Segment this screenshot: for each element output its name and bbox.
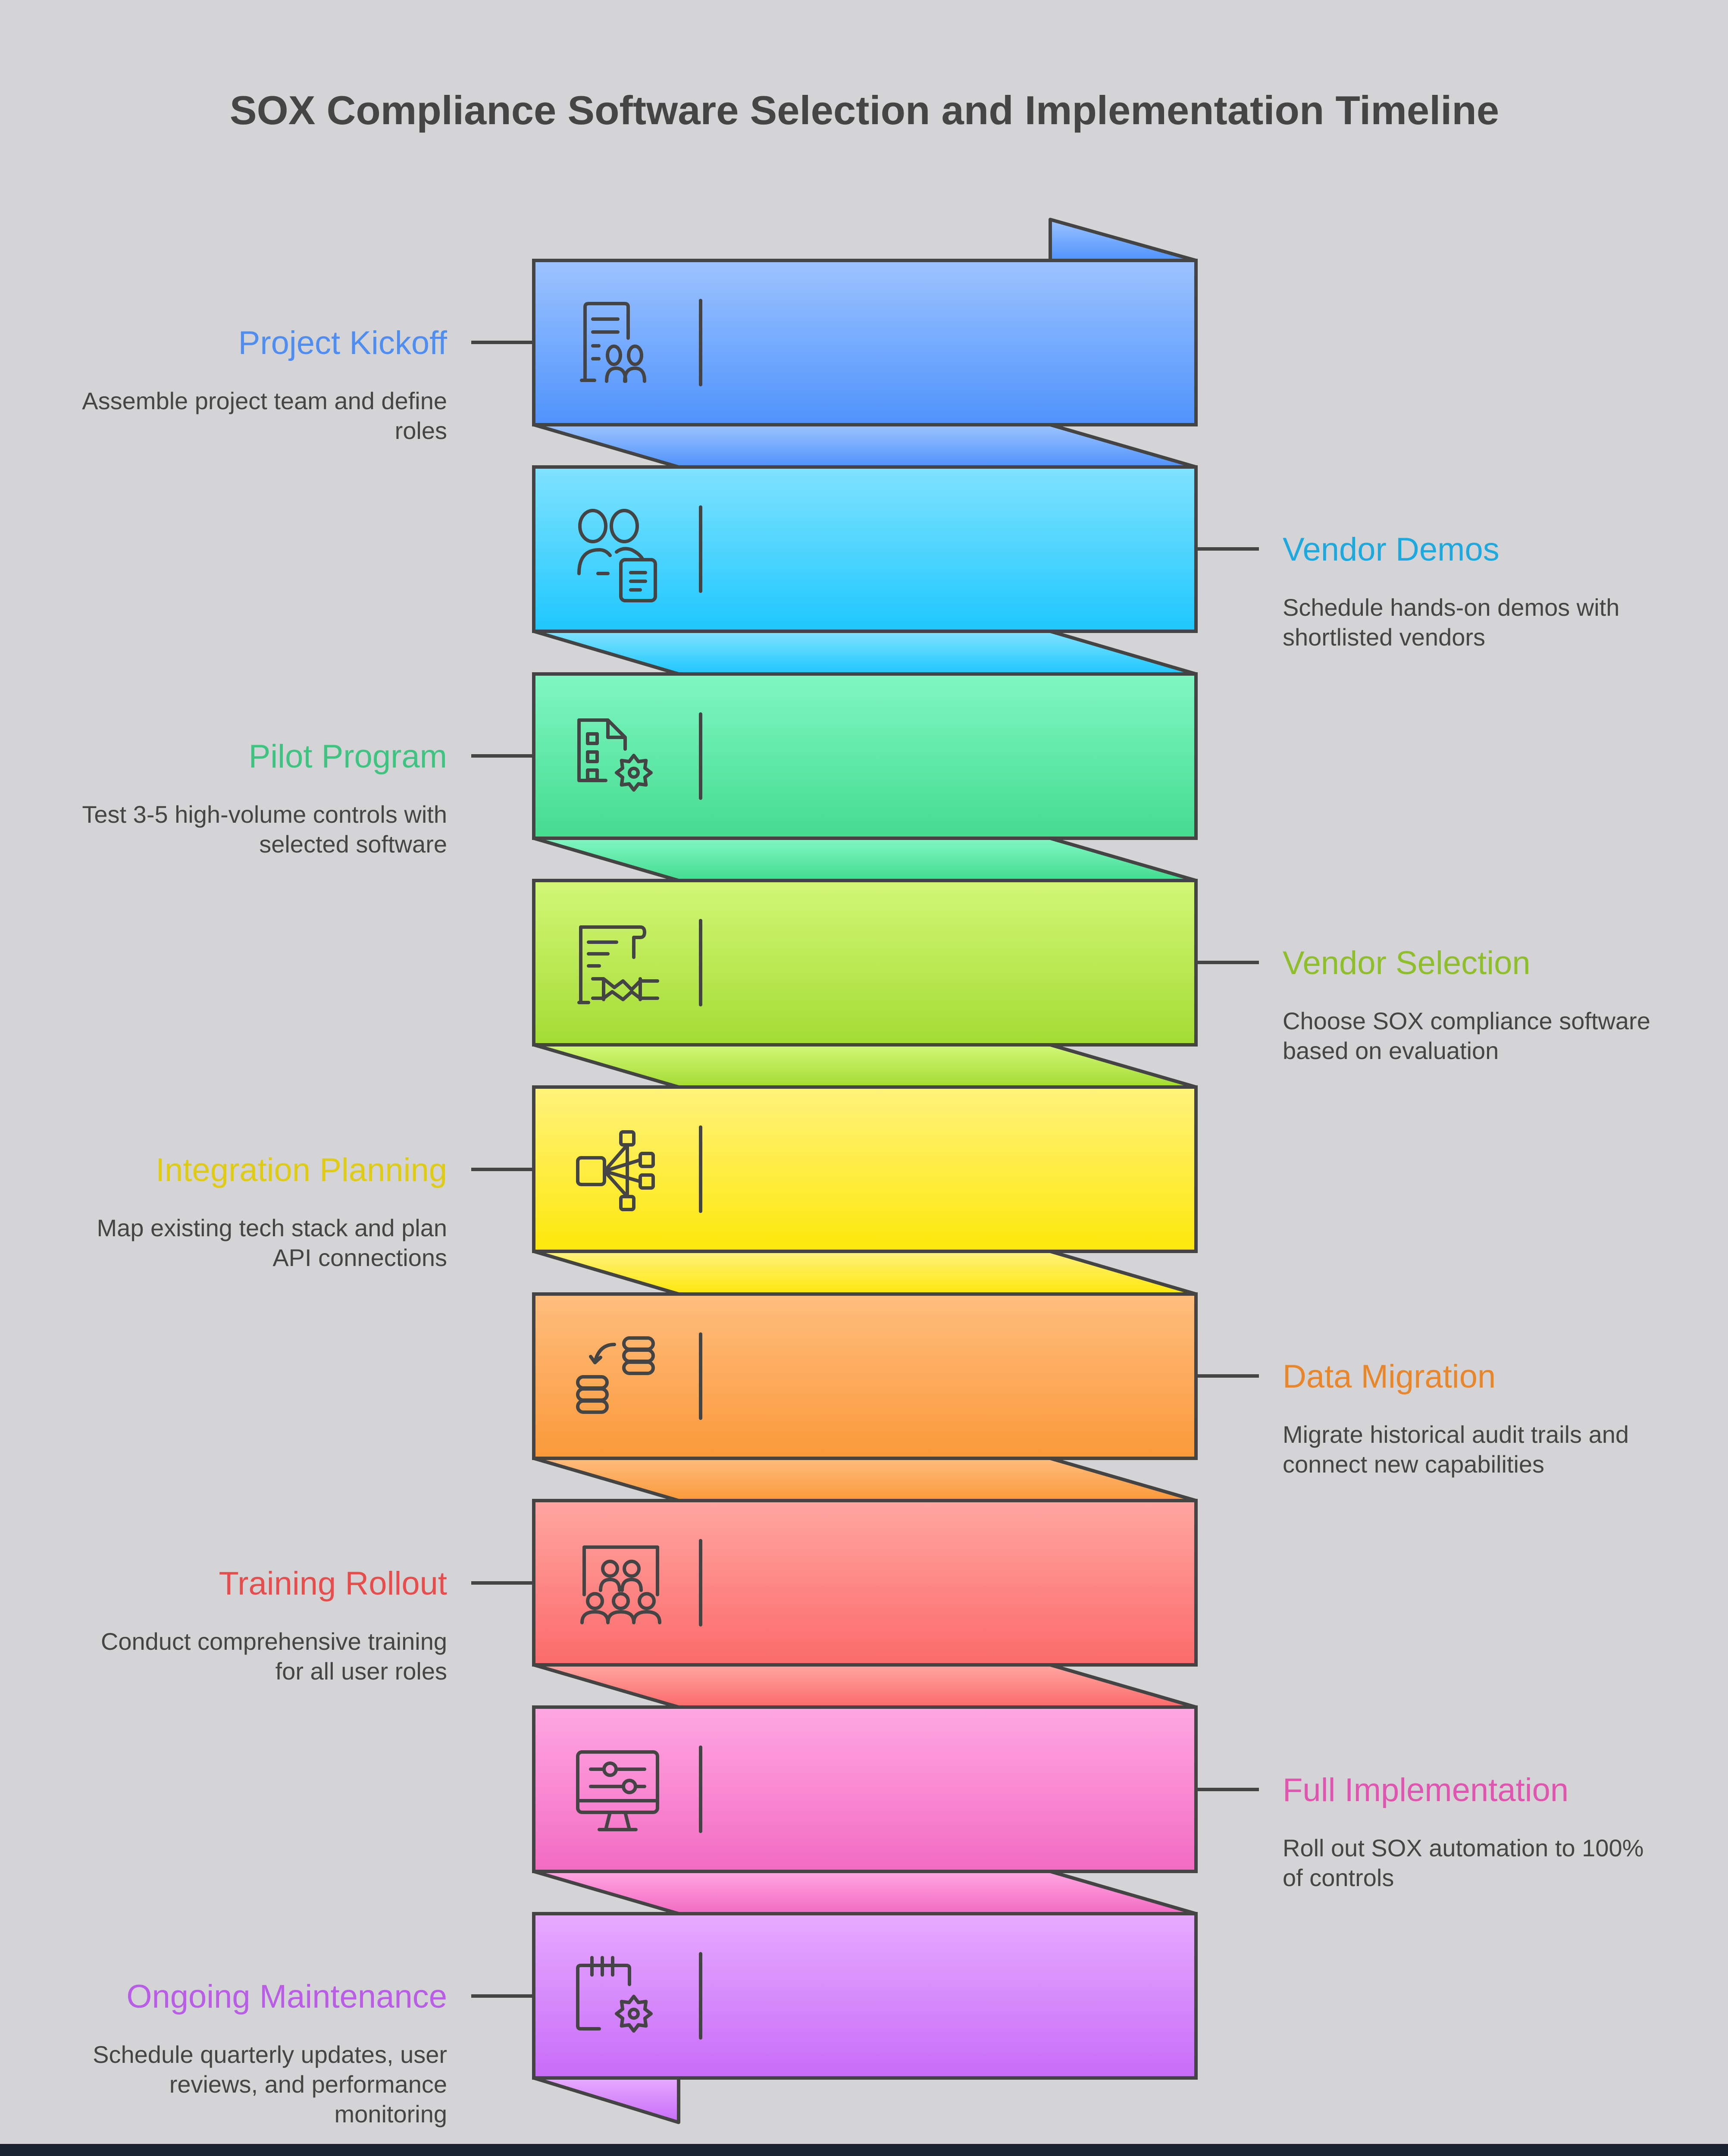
step 7: Training Rollout: for all user roles (275, 1658, 447, 1685)
step 2: Vendor Demos: shortlisted vendors (1283, 624, 1485, 651)
bottom flap (534, 2078, 679, 2122)
icon: network nodes (578, 1132, 653, 1210)
step 4: Vendor Selection: Choose SOX compliance software (1283, 1007, 1650, 1034)
step 6: Data Migration (534, 1294, 1629, 1478)
step 4: Vendor Selection: based on evaluation (1283, 1037, 1499, 1064)
step 6: Data Migration: Migrate historical audit trails and (1283, 1421, 1629, 1448)
step 3: Pilot Program (82, 674, 1196, 858)
icon: monitor with sliders (578, 1752, 657, 1830)
step 7: Training Rollout: Training Rollout (219, 1565, 447, 1602)
step 9: Ongoing Maintenance: Schedule quarterly updates, user (93, 2041, 447, 2068)
step 1: Project Kickoff: Project Kickoff (238, 325, 448, 361)
footer band (0, 2144, 1728, 2156)
step 7: Training Rollout (101, 1501, 1196, 1685)
step 3: Pilot Program: Pilot Program (249, 738, 447, 775)
step 1: Project Kickoff: roles (395, 417, 447, 444)
step 1: Project Kickoff: Assemble project team and define (82, 387, 447, 414)
folds (534, 425, 1196, 1914)
step 5: Integration Planning (97, 1087, 1196, 1271)
step 8: Full Implementation: Roll out SOX automation to 100% (1283, 1834, 1643, 1861)
icon: people with document (579, 511, 655, 601)
step 2: Vendor Demos: Vendor Demos (1283, 531, 1499, 568)
top flap (1050, 219, 1196, 260)
step 3: Pilot Program: selected software (259, 830, 447, 858)
step 6: Data Migration: connect new capabilities (1283, 1451, 1544, 1478)
icon: contract handshake (579, 927, 657, 1003)
icon: checklist with gear (579, 720, 651, 790)
step 7: Training Rollout: Conduct comprehensive training (101, 1628, 447, 1655)
step 8: Full Implementation: Full Implementation (1283, 1772, 1568, 1808)
step 9: Ongoing Maintenance: monitoring (335, 2100, 447, 2128)
step 2: Vendor Demos (534, 467, 1619, 651)
step 4: Vendor Selection (534, 881, 1650, 1064)
step 5: Integration Planning: Map existing tech stack and plan (97, 1214, 447, 1241)
step 3: Pilot Program: Test 3-5 high-volume controls with (82, 801, 447, 828)
step 5: Integration Planning: API connections (272, 1244, 447, 1271)
icon: calendar with gear (578, 1958, 651, 2031)
step 9: Ongoing Maintenance (93, 1914, 1196, 2128)
step 9: Ongoing Maintenance: Ongoing Maintenance (126, 1978, 447, 2015)
title: SOX Compliance Software Selection and Implementation Timeline (230, 88, 1499, 133)
step 2: Vendor Demos: Schedule hands-on demos with (1283, 594, 1619, 621)
icon: document with people (582, 304, 645, 381)
step 6: Data Migration: Data Migration (1283, 1358, 1496, 1395)
step 8: Full Implementation: of controls (1283, 1864, 1394, 1891)
step 4: Vendor Selection: Vendor Selection (1283, 945, 1531, 981)
step 9: Ongoing Maintenance: reviews, and performance (169, 2071, 447, 2098)
step 1: Project Kickoff (82, 260, 1196, 444)
step 8: Full Implementation (534, 1707, 1643, 1891)
icon: databases with arrows (578, 1338, 653, 1412)
step 5: Integration Planning: Integration Planning (156, 1152, 447, 1188)
icon: training group (582, 1547, 660, 1623)
